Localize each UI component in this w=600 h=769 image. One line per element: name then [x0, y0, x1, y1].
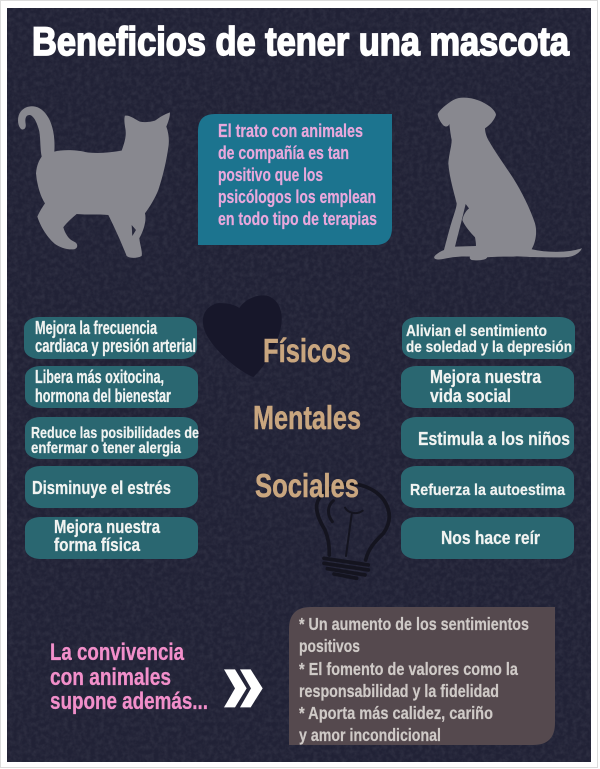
pill: children: Estimula a los niños [418, 429, 570, 449]
label: sociales: Sociales [255, 467, 359, 504]
pill: laughter [401, 517, 574, 559]
icon: light bulb [317, 484, 389, 578]
icon: heart [203, 295, 282, 377]
pill: children [401, 417, 574, 459]
pink lead text: La convivencia [50, 639, 185, 666]
callout: additional benefits: * Un aumento de los sentimientos [299, 614, 529, 634]
label: mentales: Mentales [253, 399, 361, 436]
pill: heart rate: Mejora la frecuencia [35, 318, 158, 338]
pink lead text [50, 639, 208, 715]
pill: oxytocin: hormona del bienestar [35, 386, 171, 406]
pill: loneliness: de soledad y la depresión [406, 339, 572, 356]
arrow: double chevron [224, 669, 263, 707]
pill: self-esteem [401, 466, 574, 508]
pill: stress [25, 466, 198, 508]
pill: fitness [25, 517, 198, 559]
pill: heart rate [24, 317, 197, 359]
callout: additional benefits: * El fomento de valores como la [299, 659, 518, 679]
callout: intro: en todo tipo de terapias [218, 209, 377, 229]
pill: allergies: Reduce las posibilidades de [31, 425, 199, 442]
callout: intro [198, 114, 392, 245]
icon: cat silhouette [18, 106, 170, 258]
pill: stress: Disminuye el estrés [32, 478, 171, 498]
group: left benefit pills [24, 317, 199, 559]
callout: intro: El trato con animales [218, 121, 363, 141]
pill: self-esteem: Refuerza la autoestima [410, 482, 565, 499]
pill: loneliness [402, 317, 575, 359]
pink lead text: con animales [50, 664, 171, 691]
group: category labels [253, 332, 361, 504]
pill: fitness: forma física [54, 535, 141, 555]
pill: fitness: Mejora nuestra [54, 517, 161, 537]
pill: social life: vida social [430, 386, 511, 406]
pill: social life: Mejora nuestra [430, 367, 542, 387]
callout: additional benefits: positivos [299, 636, 360, 656]
pill: heart rate: cardiaca y presión arterial [35, 336, 196, 356]
group: right benefit pills [401, 317, 575, 559]
callout: additional benefits: * Aporta más calidez, cariño [299, 703, 493, 723]
pill: laughter: Nos hace reír [441, 528, 540, 548]
callout: intro: psicólogos los emplean [218, 187, 376, 207]
callout: intro: positivo que los [218, 165, 323, 185]
pill: social life [401, 366, 574, 408]
label: físicos: Físicos [263, 332, 351, 369]
pill: loneliness: Alivian el sentimiento [406, 323, 547, 340]
pill: allergies: enfermar o tener alergia [31, 440, 181, 457]
icon: dog silhouette [434, 98, 582, 260]
callout: additional benefits: responsabilidad y la fidelidad [299, 681, 499, 701]
pill: oxytocin: Libera más oxitocina, [35, 367, 164, 387]
pink lead text: supone además... [50, 688, 208, 715]
pill: oxytocin [25, 366, 198, 408]
callout: additional benefits: y amor incondicional [299, 725, 441, 745]
callout: intro: de compañía es tan [218, 143, 349, 163]
pill: allergies [25, 417, 199, 459]
callout: additional benefits [289, 607, 555, 745]
